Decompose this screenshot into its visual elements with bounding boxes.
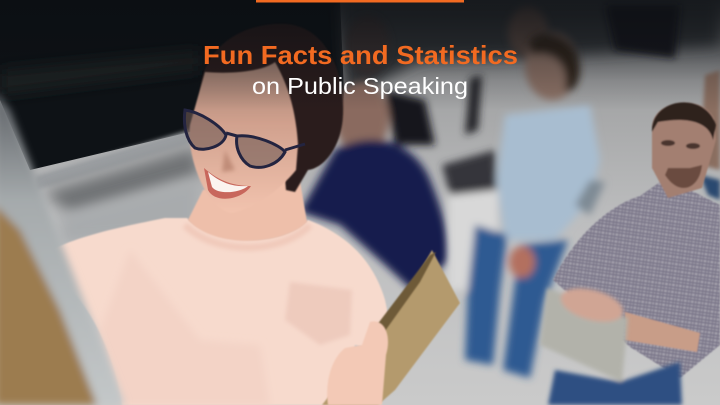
subtitle: on Public Speaking (252, 73, 468, 99)
top accent bar (256, 0, 464, 2)
audience: person in navy sweater (300, 15, 449, 290)
presenter: nose shadow (222, 150, 235, 172)
presenter: hair (200, 24, 343, 192)
presenter: smile (204, 168, 251, 199)
presenter: face (189, 62, 298, 213)
presenter: glasses (184, 110, 305, 167)
presenter: shirt folds (100, 225, 352, 405)
presenter (52, 24, 460, 405)
foreground flip chart board (0, 90, 125, 405)
audience: woman in light blue shirt (442, 32, 605, 378)
presenter: hand with folder (322, 250, 460, 405)
presenter: neck (188, 170, 307, 241)
audience: back row person (465, 6, 548, 135)
presenter: shirt (52, 218, 389, 405)
audience: man in checked shirt (540, 70, 720, 405)
title: Fun Facts and Statistics (203, 40, 518, 70)
top dark overlay (0, 0, 720, 110)
